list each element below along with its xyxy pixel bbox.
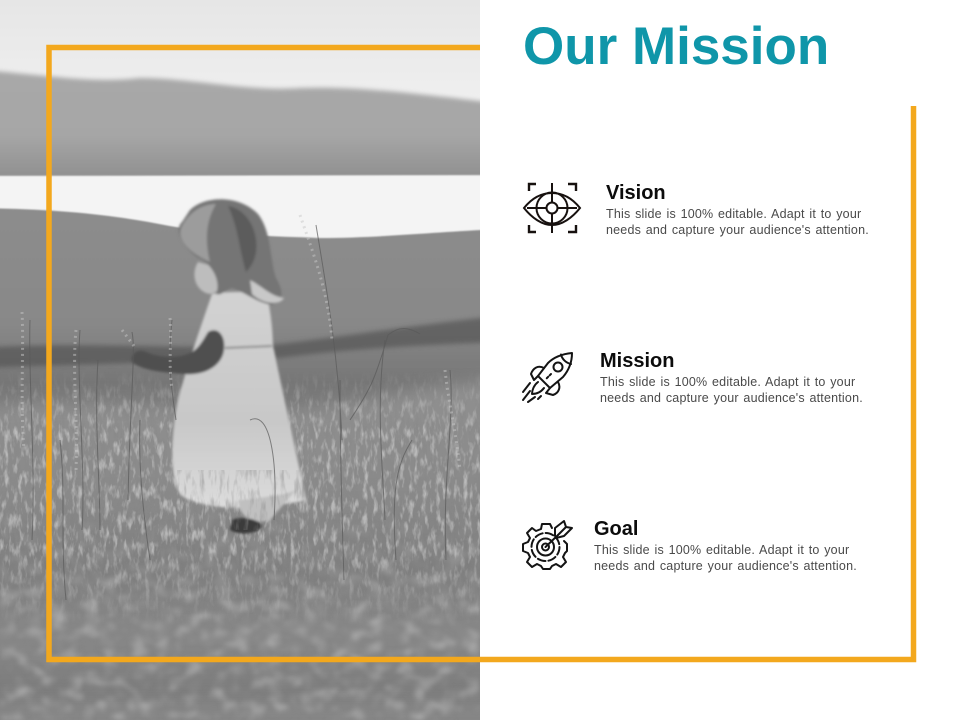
- text: Vision: This slide is 100% editable. Adapt it to your: [606, 207, 861, 221]
- sky: [0, 0, 480, 120]
- blurred foreground foliage: [0, 531, 480, 720]
- text: Mission: Mission: [600, 350, 674, 372]
- text: Goal: needs and capture your audience's attention.: [594, 559, 857, 573]
- text: Goal: [594, 518, 857, 573]
- girl: [132, 199, 306, 533]
- text: Vision: Vision: [606, 182, 666, 204]
- text: Mission: needs and capture your audience's attention.: [600, 391, 863, 405]
- text: Mission: This slide is 100% editable. Adapt it to your: [600, 375, 855, 389]
- text: Vision: [606, 182, 869, 237]
- lake: [0, 175, 520, 238]
- distant hills: [0, 68, 520, 180]
- text: Goal: Goal: [594, 518, 638, 540]
- title: Our Mission: [523, 17, 829, 76]
- text: Vision: needs and capture your audience's attention.: [606, 223, 869, 237]
- icon: rocket: [522, 352, 573, 403]
- grass texture: [0, 379, 480, 612]
- grass stems: [30, 225, 451, 600]
- icon: eye with crosshair: [522, 182, 582, 234]
- grass over the dress: [170, 470, 310, 530]
- far field: [0, 208, 520, 440]
- dark band in field: [0, 316, 500, 368]
- meadow: [0, 378, 520, 720]
- icon: gear with target and arrow: [522, 520, 573, 570]
- photo: girl in a meadow: [0, 0, 480, 720]
- text: Goal: This slide is 100% editable. Adapt it to your: [594, 543, 849, 557]
- text: Mission: [600, 350, 863, 405]
